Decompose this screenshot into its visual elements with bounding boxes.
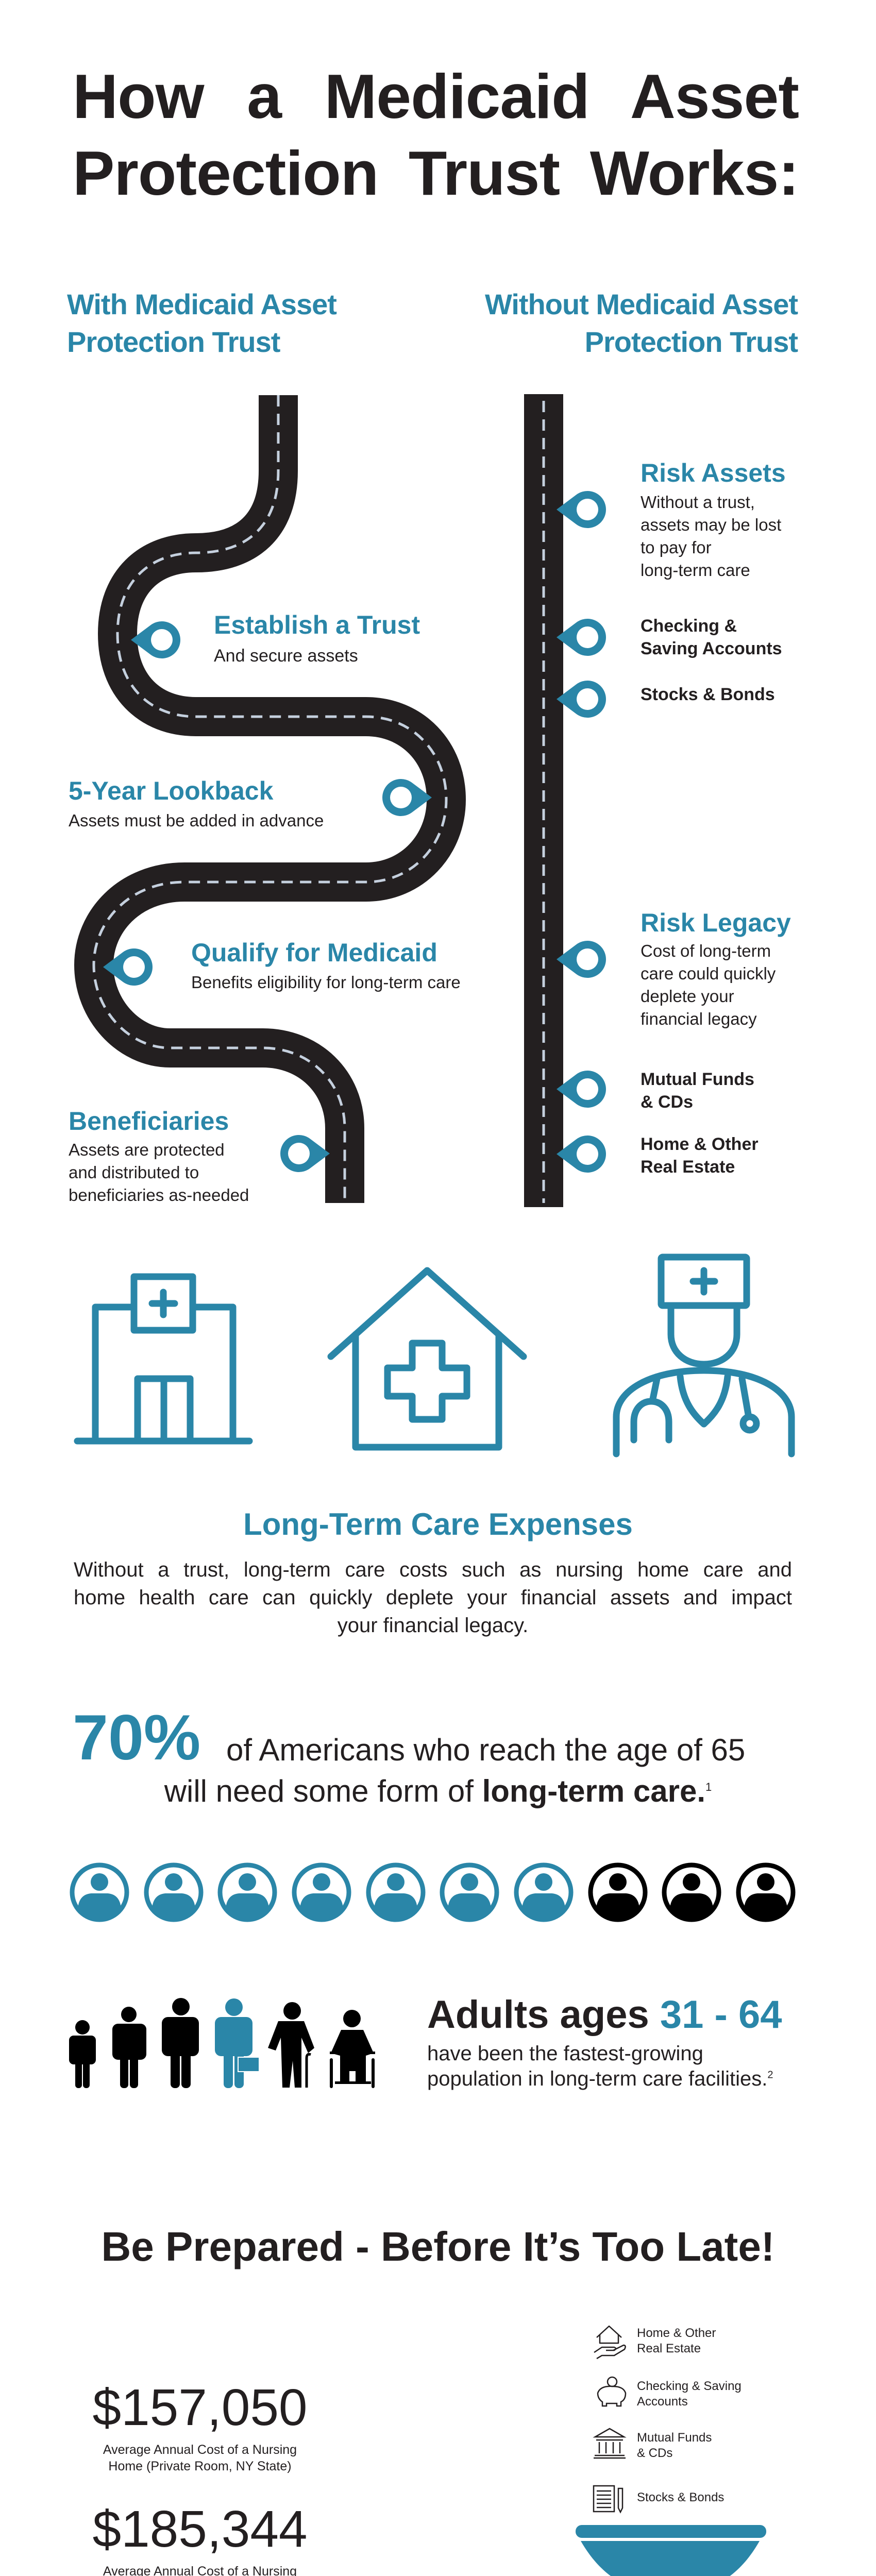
risk legacy: deplete your [641,987,734,1006]
cost: NY: $157,050 [92,2379,308,2436]
stat: adults 31-64: Adults ages 31 - 64 [427,1993,782,2037]
home & real estate [641,1134,759,1177]
risk assets: to pay for [641,538,712,557]
heading: with trust [67,288,337,358]
risk legacy: Cost of long-term [641,941,771,960]
pin: stocks [557,681,606,718]
pin: mutual funds [557,1071,606,1108]
icon: house with cross [331,1270,524,1447]
heading: with trust: With Medicaid Asset [67,288,336,320]
risk legacy: Risk Legacy [641,908,791,937]
risk assets: long-term care [641,561,750,580]
asset list labels: Real Estate [637,2342,701,2355]
risk assets: Without a trust, [641,493,755,512]
icon: piggy bank [598,2377,626,2406]
pin: establish a trust [131,621,180,658]
road: with trust (winding) [94,395,446,1203]
scale [107,2525,766,2576]
icon: bank [594,2429,626,2458]
stat: 70%: of Americans who reach the age of 65 [226,1733,745,1767]
cost: NY: Home (Private Room, NY State) [108,2459,292,2473]
checking & saving [641,616,782,658]
road: without trust (straight) [524,394,563,1207]
heading: with trust: Protection Trust [67,326,280,358]
pin: risk legacy [557,941,606,978]
mutual funds [641,1070,754,1112]
title: How a Medicaid Asset Protection Trust Works: [73,61,799,208]
step: beneficiaries: Assets are protected [69,1140,225,1159]
cost: NY: Average Annual Cost of a Nursing [103,2443,297,2457]
stat: adults 31-64: have been the fastest-growing [427,2042,703,2065]
pin: home [557,1136,606,1173]
mutual funds: Mutual Funds [641,1070,754,1089]
mutual funds: & CDs [641,1092,693,1112]
pin: checking [557,619,606,656]
home & real estate: Home & Other [641,1134,759,1154]
pin: risk assets [557,491,606,528]
asset list labels: Checking & Saving [637,2379,742,2393]
icon: home in hand [594,2326,626,2359]
step: 5-year lookback: 5-Year Lookback [69,776,273,805]
asset list labels: Home & Other [637,2326,716,2340]
person icons row (7 teal, 3 black) [72,1865,793,1920]
stat: adults 31-64: population in long-term care facilities.2 [427,2067,773,2090]
step: qualify: Qualify for Medicaid [191,938,437,967]
asset list labels: Mutual Funds [637,2431,712,2445]
asset list labels: Stocks & Bonds [637,2490,724,2504]
risk legacy [641,908,791,1028]
icon: doctor [616,1257,791,1454]
asset list labels [637,2326,742,2504]
step: beneficiaries [69,1107,249,1205]
risk assets: Risk Assets [641,459,786,487]
stocks & bonds: Stocks & Bonds [641,685,775,704]
heading: be prepared: Be Prepared - Before It’s Too Late! [102,2224,774,2269]
heading: long-term care expenses: Long-Term Care Expenses [243,1507,633,1541]
heading: without trust [485,288,798,358]
risk assets [641,459,786,580]
paragraph: ltc: your financial legacy. [338,1614,528,1637]
icon: document [594,2486,622,2512]
risk legacy: care could quickly [641,964,776,983]
pin: beneficiaries [280,1135,330,1172]
risk legacy: financial legacy [641,1009,757,1028]
pin: 5-year lookback [382,779,432,816]
stat: 70%: will need some form of long-term care.1 [164,1774,712,1808]
step: 5-year lookback: Assets must be added in advance [69,811,324,830]
step: establish a trust: Establish a Trust [214,611,420,639]
heading: without trust: Protection Trust [585,326,798,358]
cost: NY [92,2379,308,2473]
paragraph: ltc: Without a trust, long-term care costs such as nursing home care and [74,1558,792,1581]
people figures by age [69,1998,375,2088]
stat: 70% [73,1702,745,1808]
step: beneficiaries: Beneficiaries [69,1107,229,1136]
step: qualify: Benefits eligibility for long-term care [191,973,461,992]
step: beneficiaries: beneficiaries as-needed [69,1185,249,1205]
heading: without trust: Without Medicaid Asset [485,288,798,320]
step: establish a trust: And secure assets [214,646,358,666]
step: qualify [191,938,461,992]
stat: adults 31-64 [427,1993,782,2090]
home & real estate: Real Estate [641,1157,735,1177]
asset list labels: Accounts [637,2395,688,2409]
stat: 70%: 70% [73,1702,200,1773]
step: beneficiaries: and distributed to [69,1163,199,1182]
checking & saving: Saving Accounts [641,639,782,658]
paragraph: ltc [74,1558,792,1637]
cost: CT: $185,344 [92,2500,308,2558]
pin: qualify for medicaid [103,948,153,986]
step: 5-year lookback [69,776,324,830]
icon: hospital [77,1277,249,1441]
step: establish a trust [214,611,420,666]
checking & saving: Checking & [641,616,737,636]
risk assets: assets may be lost [641,515,781,534]
asset list labels: & CDs [637,2446,672,2460]
paragraph: ltc: home health care can quickly deplete your financial assets and impact [74,1586,792,1609]
